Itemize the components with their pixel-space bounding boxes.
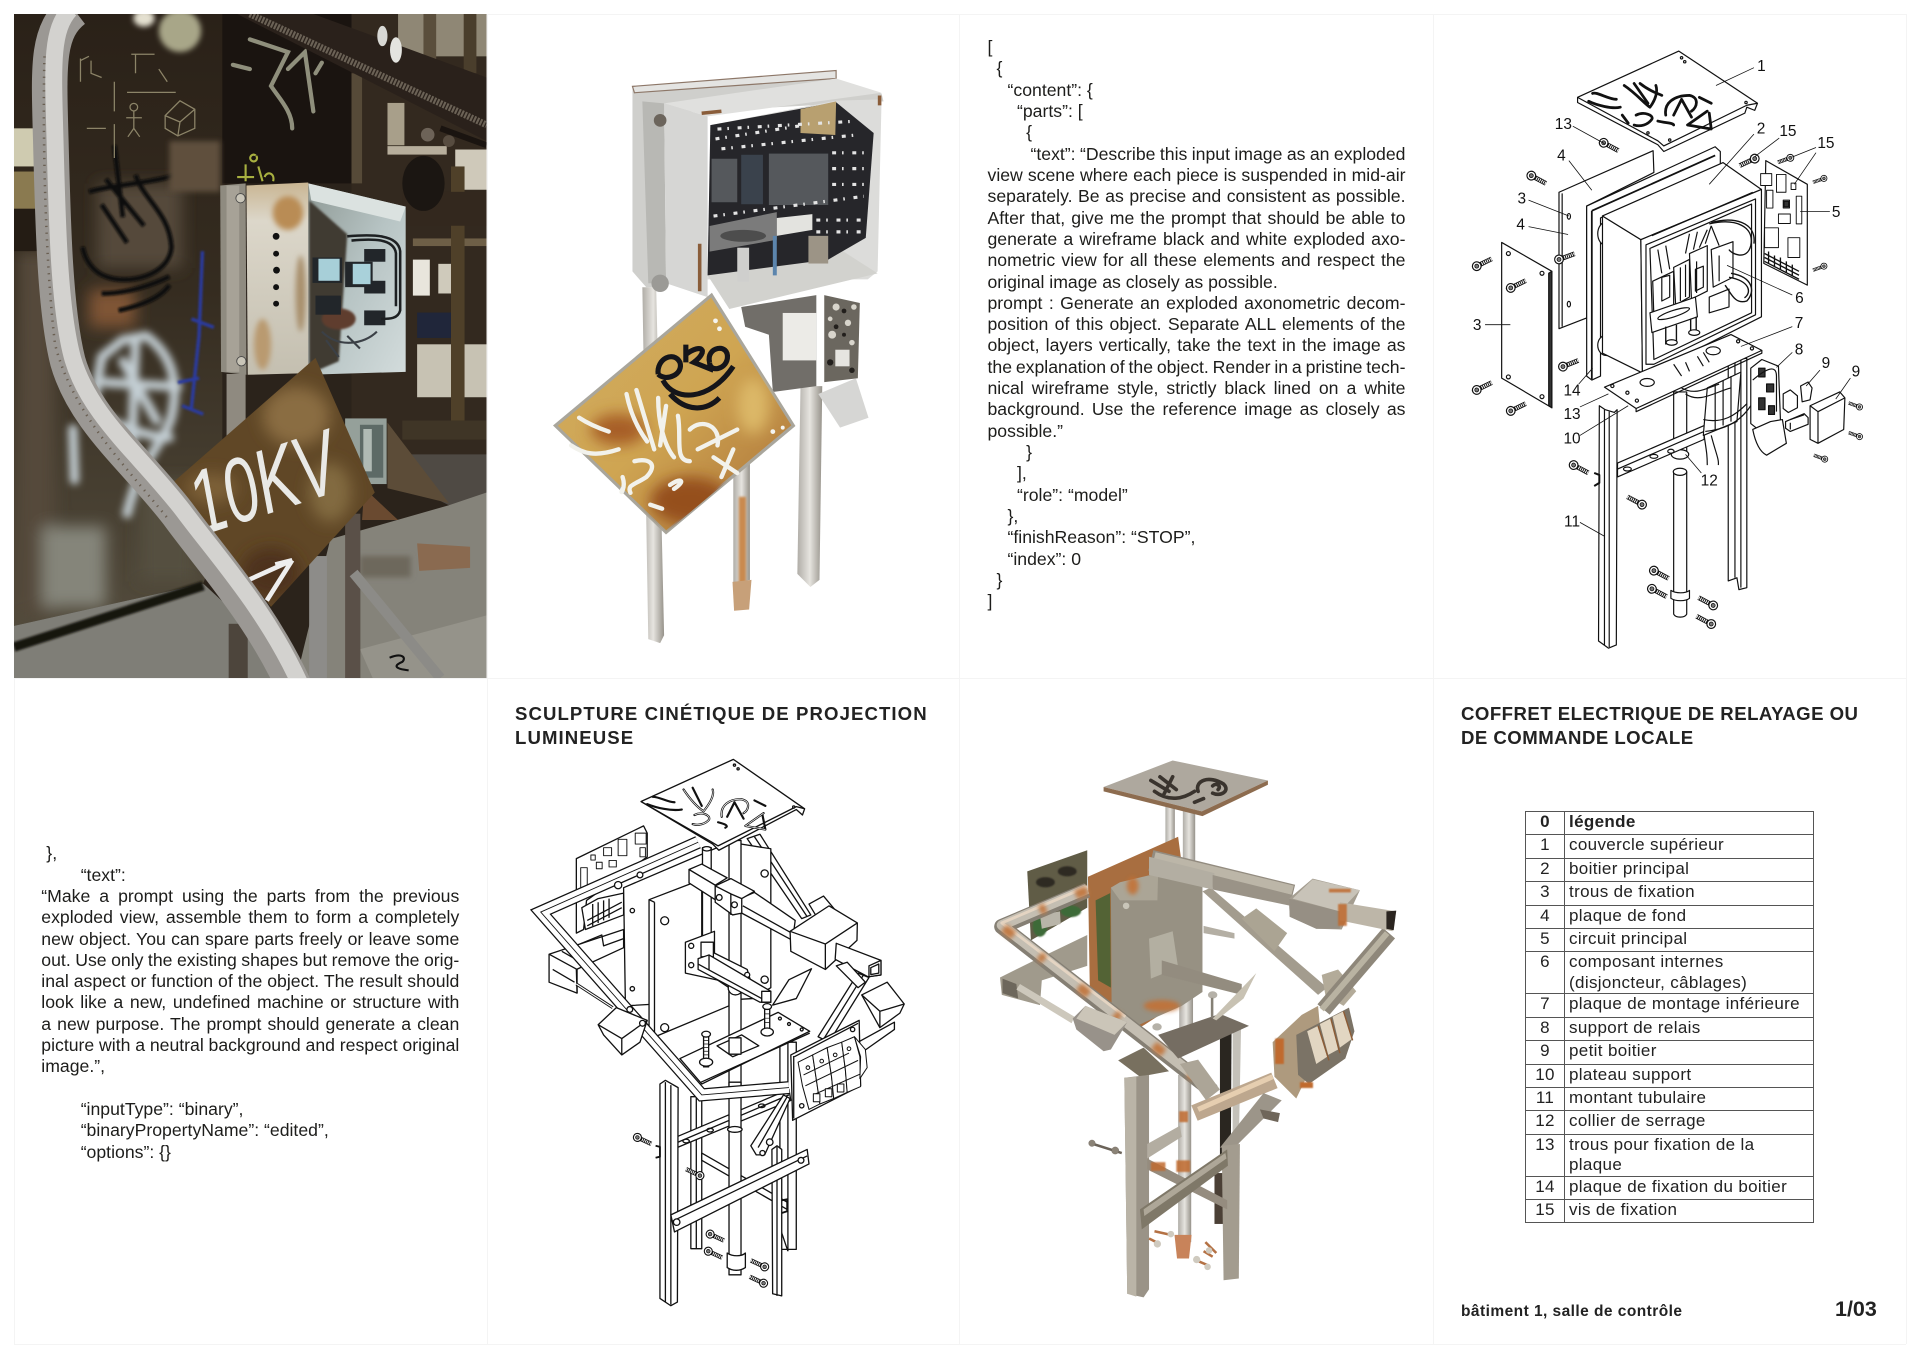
panel: assembled kinetic sculpture line drawing xyxy=(541,759,904,1306)
part 4: rear plate xyxy=(1559,151,1654,329)
render: rear diagonal strut and side box xyxy=(1000,888,1356,1023)
table: numbered legend of parts: support de relais xyxy=(1569,1018,1701,1037)
part number labels: 5 xyxy=(1832,204,1840,221)
text block: prompt one, JSON exploded view: separately. Be as precise and consistent as possible. xyxy=(988,186,1406,206)
table: numbered legend of parts: boitier principal xyxy=(1569,859,1689,878)
part number labels: 7 xyxy=(1795,315,1803,332)
table: numbered legend of parts: circuit principal xyxy=(1569,929,1687,948)
central thin rod and bracket xyxy=(685,847,771,1002)
leader lines xyxy=(1485,68,1850,536)
floor xyxy=(14,543,470,678)
part 1: top cover plate with graffiti xyxy=(1578,51,1757,152)
table: numbered legend of parts: (disjoncteur, câblages) xyxy=(1569,973,1747,992)
text block: prompt one, JSON exploded view: the explanation of the object. Render in a pristine tech- xyxy=(988,357,1406,377)
text block: prompt one, JSON exploded view: nical wireframe style, strictly black lined on a white xyxy=(988,378,1406,398)
text block: prompt one, JSON exploded view: }, xyxy=(1008,506,1018,526)
screws and bolts xyxy=(1471,137,1863,630)
table: numbered legend of parts: 9 xyxy=(1540,1041,1550,1060)
table: numbered legend of parts: 3 xyxy=(1540,882,1550,901)
table: numbered legend of parts: 14 xyxy=(1535,1177,1555,1196)
rear diagonal struts xyxy=(747,834,836,922)
render: white tag xyxy=(571,390,737,509)
part number labels: 14 xyxy=(1563,382,1581,399)
table: numbered legend of parts: 13 xyxy=(1535,1135,1555,1154)
text block: prompt one, JSON exploded view: “content”: { xyxy=(1008,80,1093,100)
part 5: circuit board xyxy=(1761,161,1807,285)
text block: prompt two, reassembly instructions: a new purpose. The prompt should generate a clean xyxy=(41,1014,459,1034)
text block: prompt two, reassembly instructions: picture with a neutral background and respect original xyxy=(41,1035,459,1055)
part number labels: 3 xyxy=(1518,190,1526,207)
heading: kinetic sculpture title xyxy=(515,703,928,748)
text block: prompt one, JSON exploded view: object, layers vertically, take the text in the image as xyxy=(988,335,1406,355)
part number labels: 13 xyxy=(1563,406,1581,423)
footer: page number: 1/03 xyxy=(1835,1297,1877,1321)
circuit board xyxy=(576,826,647,933)
part number labels: 12 xyxy=(1701,473,1718,490)
part 14: box mounting flange xyxy=(1587,147,1720,380)
concrete wedge and small box xyxy=(345,418,449,520)
text block: prompt one, JSON exploded view: “parts”: [ xyxy=(1017,101,1083,121)
lower-left junction box xyxy=(598,1007,647,1055)
rusty sign with 10KV graffiti: 10KV xyxy=(176,411,355,555)
text block: prompt one, JSON exploded view: } xyxy=(996,570,1002,590)
text block: prompt two, reassembly instructions xyxy=(41,843,460,1162)
heading: electrical box title: DE COMMANDE LOCALE xyxy=(1461,727,1694,748)
part 3: side plate xyxy=(1502,242,1552,408)
text block: prompt one, JSON exploded view: background. Use the reference image as closely as xyxy=(988,399,1406,419)
right diagonal strut and small box xyxy=(818,962,904,1051)
text block: prompt one, JSON exploded view: { xyxy=(1026,122,1032,142)
part number labels: 6 xyxy=(1795,290,1804,307)
graffiti arrow xyxy=(250,560,292,601)
foreground curved pipe xyxy=(44,10,302,692)
wiring block under the plate xyxy=(1682,372,1751,465)
table: numbered legend of parts xyxy=(1525,811,1814,1223)
back legs xyxy=(691,1042,796,1251)
part number labels: 10 xyxy=(1563,431,1581,448)
front second channel xyxy=(772,1146,787,1296)
wall with graffiti xyxy=(14,10,351,626)
part number labels: 11 xyxy=(1564,514,1580,531)
text block: prompt two, reassembly instructions: }, xyxy=(46,843,57,863)
photo background: industrial hall xyxy=(14,14,487,678)
table: numbered legend of parts: 0 xyxy=(1540,812,1550,831)
part 10: lower mounting plate xyxy=(1604,335,1762,412)
part number labels xyxy=(1473,58,1860,531)
cover graffiti xyxy=(1589,83,1711,129)
part 9: small relays and box xyxy=(1783,382,1845,443)
render: large end box xyxy=(1289,879,1396,931)
part number labels: 15 xyxy=(1817,135,1834,152)
text block: prompt one, JSON exploded view: } xyxy=(1026,442,1032,462)
text block: prompt one, JSON exploded view: { xyxy=(996,58,1002,78)
part number labels: 8 xyxy=(1795,341,1803,358)
part number labels: 15 xyxy=(1779,123,1797,140)
rusty sign with 10KV graffiti xyxy=(174,358,375,607)
front vertical plate xyxy=(649,883,729,1039)
text block: prompt two, reassembly instructions: look like a new, undefined machine or structure with xyxy=(41,992,459,1012)
outlined graffiti xyxy=(647,788,765,830)
table: numbered legend of parts: plaque de fond xyxy=(1569,906,1686,925)
table: numbered legend of parts: 6 xyxy=(1540,952,1550,971)
central long pole with clamp xyxy=(727,840,745,1275)
text block: prompt two, reassembly instructions: inal aspect or function of the object. The result should xyxy=(41,971,459,991)
part number labels: 2 xyxy=(1757,120,1765,137)
text block: prompt one, JSON exploded view: ], xyxy=(1017,463,1027,483)
text block: prompt two, reassembly instructions: “text”: xyxy=(81,865,126,885)
text block: prompt one, JSON exploded view: generate a wireframe black and white exploded axo- xyxy=(988,229,1406,249)
text block: prompt one, JSON exploded view xyxy=(988,37,1406,611)
part number labels: 9 xyxy=(1822,355,1830,372)
text block: prompt two, reassembly instructions: “Make a prompt using the parts from the previous xyxy=(41,886,459,906)
panel: exploded axonometric line drawing with numbered parts xyxy=(1471,51,1863,648)
table: numbered legend of parts: couvercle supérieur xyxy=(1569,835,1724,854)
lower X cross bars xyxy=(677,1089,791,1209)
text block: prompt two, reassembly instructions: new object. You can spare parts freely or leave some xyxy=(41,929,459,949)
text block: prompt one, JSON exploded view: “role”: “model” xyxy=(1017,485,1128,505)
render: black tag xyxy=(658,345,733,408)
table: numbered legend of parts: 7 xyxy=(1540,994,1550,1013)
table: numbered legend of parts: petit boitier xyxy=(1569,1041,1657,1060)
table: numbered legend of parts: plaque de montage inférieure xyxy=(1569,994,1800,1013)
main tubular frame xyxy=(541,842,789,1095)
render: open grey electrical box xyxy=(632,71,884,309)
table: numbered legend of parts: plaque xyxy=(1569,1155,1622,1174)
text block: prompt one, JSON exploded view: “finishReason”: “STOP”, xyxy=(1008,527,1195,547)
table: numbered legend of parts: 1 xyxy=(1540,835,1550,854)
text block: prompt one, JSON exploded view: [ xyxy=(988,37,992,57)
part number labels: 4 xyxy=(1557,148,1566,165)
render: central poles xyxy=(1165,806,1195,1258)
table: numbered legend of parts: 12 xyxy=(1535,1111,1555,1130)
screws xyxy=(632,1132,770,1289)
text block: prompt one, JSON exploded view: nometric view for all these elements and respect the xyxy=(988,250,1406,270)
part 6: breakers and cabling xyxy=(1650,220,1754,345)
text block: prompt one, JSON exploded view: position of this object. Separate ALL elements of the xyxy=(988,314,1406,334)
text block: prompt two, reassembly instructions: “inputType”: “binary”, xyxy=(81,1099,243,1119)
heading: electrical box title: COFFRET ELECTRIQUE DE RELAYAGE OU xyxy=(1461,703,1858,724)
table: numbered legend of parts: légende xyxy=(1569,812,1636,831)
text block: prompt one, JSON exploded view: view scene where each piece is suspended in mid-air xyxy=(988,165,1406,185)
part 11: front channel upright xyxy=(1594,406,1617,648)
electrical box with open door xyxy=(220,183,406,375)
text block: prompt two, reassembly instructions: image.”, xyxy=(41,1056,105,1076)
part 2: main box casing with internal components xyxy=(1602,163,1761,373)
render: rusty sign with graffiti tags xyxy=(555,295,793,532)
text block: prompt one, JSON exploded view: ] xyxy=(988,591,992,611)
text block: prompt two, reassembly instructions: out. Use only the existing shapes but remove the orig- xyxy=(41,950,459,970)
part number labels: 13 xyxy=(1555,116,1572,133)
part 12: central tube with clamp xyxy=(1671,392,1689,617)
text block: prompt one, JSON exploded view: “text”: “Describe this input image as an exploded xyxy=(1030,144,1406,164)
table: numbered legend of parts: 15 xyxy=(1535,1200,1555,1219)
breakers xyxy=(798,1037,867,1109)
footer: building and room caption: bâtiment 1, salle de contrôle xyxy=(1461,1303,1682,1320)
table: numbered legend of parts: trous pour fixation de la xyxy=(1569,1135,1754,1154)
table: numbered legend of parts: 4 xyxy=(1540,906,1550,925)
table: numbered legend of parts: 10 xyxy=(1535,1065,1555,1084)
render: front square leg xyxy=(1124,1075,1240,1297)
table: numbered legend of parts: trous de fixation xyxy=(1569,882,1695,901)
render: breaker panel xyxy=(1220,1006,1354,1148)
text block: prompt two, reassembly instructions: exploded view, assemble them to form a completely xyxy=(41,907,459,927)
table: numbered legend of parts: collier de serrage xyxy=(1569,1111,1706,1130)
large back plate xyxy=(624,842,771,1006)
heading: electrical box title xyxy=(1461,703,1858,748)
part number labels: 1 xyxy=(1757,58,1766,75)
render: lower plates xyxy=(1118,973,1256,1077)
brace with pivot xyxy=(751,1095,790,1156)
part number labels: 9 xyxy=(1852,363,1860,380)
part number labels: 4 xyxy=(1516,216,1525,233)
rail cross bar xyxy=(1618,426,1704,477)
table: numbered legend of parts: vis de fixation xyxy=(1569,1200,1677,1219)
render: lower-left junction box xyxy=(1073,1006,1220,1100)
text block: prompt two, reassembly instructions: “binaryPropertyName”: “edited”, xyxy=(81,1120,329,1140)
part 8: relay support xyxy=(1751,359,1786,455)
render: lower mounting with circuit parts xyxy=(741,295,869,428)
render: top plate with etched tag xyxy=(1104,760,1268,816)
table: numbered legend of parts: 2 xyxy=(1540,859,1550,878)
render: side bolts xyxy=(1089,1140,1216,1270)
render: back legs xyxy=(1214,1028,1241,1224)
overhead steel beam xyxy=(237,14,487,211)
table: numbered legend of parts: plaque de fixation du boitier xyxy=(1569,1177,1787,1196)
table: numbered legend of parts: 5 xyxy=(1540,929,1550,948)
text block: prompt one, JSON exploded view: “index”: 0 xyxy=(1008,549,1081,569)
table: numbered legend of parts: 11 xyxy=(1536,1088,1554,1107)
heading: kinetic sculpture title: SCULPTURE CINÉTIQUE DE PROJECTION xyxy=(515,703,928,724)
text block: prompt one, JSON exploded view: After that, give me the prompt that should be able to xyxy=(988,208,1406,228)
table: numbered legend of parts: montant tubulaire xyxy=(1569,1088,1706,1107)
text block: prompt one, JSON exploded view: possible.” xyxy=(988,421,1063,441)
render: main tubular frame xyxy=(1002,857,1389,1113)
panel: 3D photogrammetry render of the box xyxy=(555,71,884,643)
table: numbered legend of parts: plateau support xyxy=(1569,1065,1691,1084)
horizontal arm with sleeve and end box xyxy=(689,864,881,977)
table: numbered legend of parts: composant internes xyxy=(1569,952,1724,971)
top plate with graffiti xyxy=(641,759,805,850)
render: PCB xyxy=(1027,850,1087,940)
render: sleeve on arm xyxy=(1149,857,1293,906)
panel: photorealistic render of the assembled sculpture xyxy=(1000,760,1396,1297)
part 11: back channel uprights xyxy=(1728,358,1747,590)
render: rusty back plate xyxy=(1088,837,1202,1028)
support posts xyxy=(227,374,440,678)
side box behind frame xyxy=(549,929,624,1008)
long front rail xyxy=(671,1149,809,1232)
lower support plate with bolts xyxy=(680,840,810,1097)
table: numbered legend of parts: 8 xyxy=(1540,1018,1550,1037)
front upright channel xyxy=(656,1080,678,1306)
panel: site photograph of the electrical box xyxy=(14,10,487,692)
text block: prompt one, JSON exploded view: original image as closely as possible. xyxy=(988,272,1278,292)
render: three support legs xyxy=(642,287,822,643)
text block: prompt two, reassembly instructions: “options”: {} xyxy=(81,1142,171,1162)
breaker panel xyxy=(791,1020,867,1120)
render: front steel plate xyxy=(1111,864,1242,1028)
heading: kinetic sculpture title: LUMINEUSE xyxy=(515,727,634,748)
render: lower cross bars xyxy=(1140,1111,1228,1229)
part number labels: 3 xyxy=(1473,317,1481,334)
text block: prompt one, JSON exploded view: prompt : Generate an exploded axonometric decom- xyxy=(988,293,1406,313)
kite fin xyxy=(773,969,812,1005)
